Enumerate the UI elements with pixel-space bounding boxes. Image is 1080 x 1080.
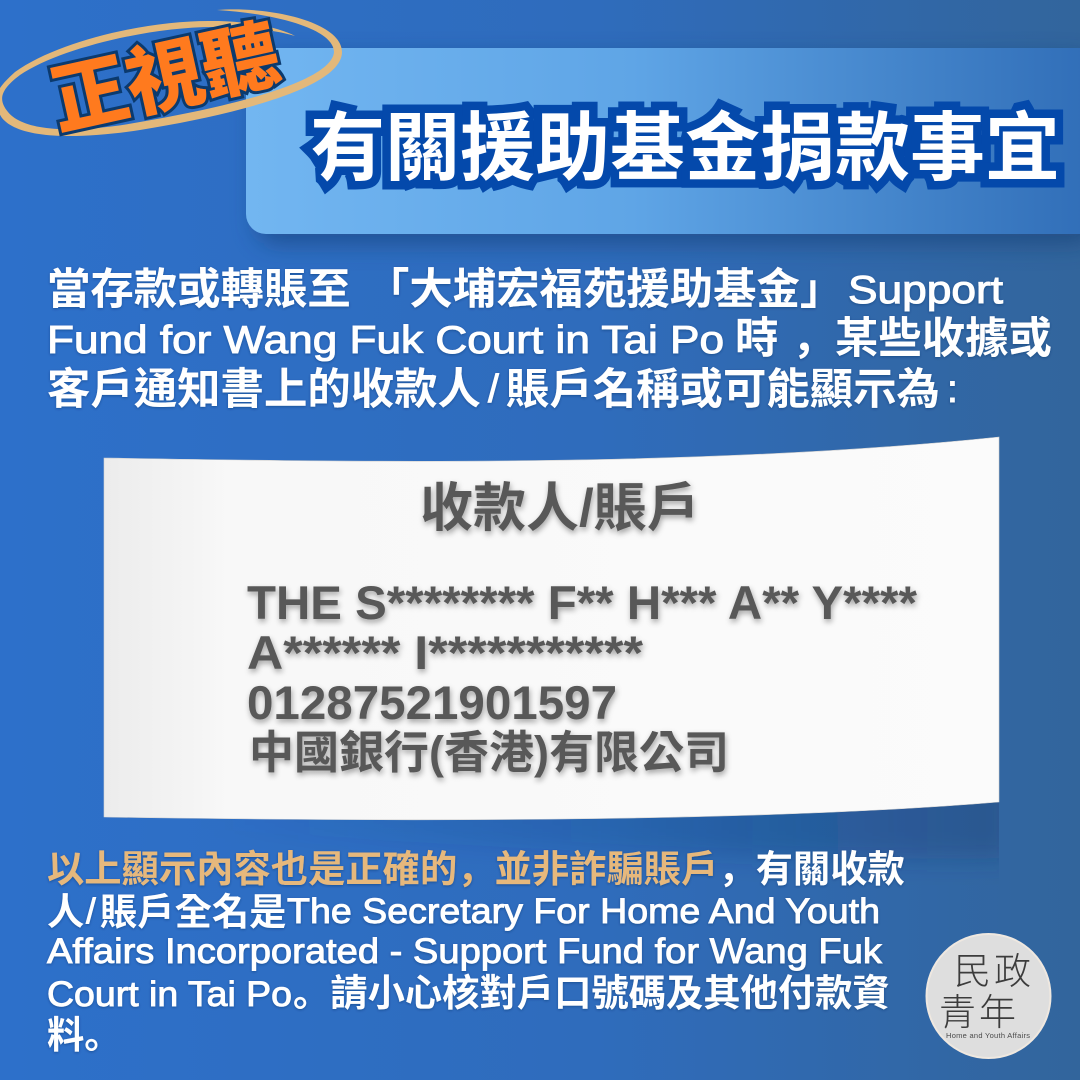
text block: intro: ， bbox=[792, 315, 835, 363]
card: account masked name: THE S******** F** H*** A** Y**** bbox=[247, 576, 918, 629]
text block: intro: 當存款或轉賬至 bbox=[47, 266, 351, 314]
text block: intro: 賬戶名稱或可能顯示為 bbox=[506, 366, 940, 414]
icon: logo badge: 民 bbox=[954, 951, 991, 992]
text block: intro: 時 bbox=[735, 315, 778, 363]
text block: intro: 客戶通知書上的收款人 bbox=[47, 366, 481, 414]
card: account number: 01287521901597 bbox=[247, 676, 617, 729]
text block: note: The Secretary For Home And Youth bbox=[287, 892, 880, 931]
tag: 正視聽: 正視聽 bbox=[43, 12, 287, 146]
text block: note: 以上顯示內容也是正確的，並非詐騙賬戶，有關收款 bbox=[47, 848, 905, 890]
text block: note: 人 bbox=[47, 891, 84, 933]
text block: intro: 某些收據或 bbox=[835, 315, 1052, 363]
text block: note bbox=[47, 848, 905, 1056]
icon: logo badge: Home and Youth Affairs bbox=[946, 1031, 1030, 1040]
panel: title banner bbox=[246, 48, 1080, 244]
text block: intro: : bbox=[947, 368, 958, 411]
icon: logo badge: 政 bbox=[994, 951, 1031, 992]
tag: hand-drawn ellipse bbox=[0, 9, 342, 136]
icon: logo badge: 年 bbox=[979, 992, 1016, 1033]
text block: intro: Fund for Wang Fuk Court in Tai Po bbox=[47, 319, 724, 362]
card: account masked name line 2: A****** I*********** bbox=[247, 626, 644, 679]
text block: note: 賬戶全名是 bbox=[100, 891, 286, 933]
text block: intro bbox=[47, 266, 1052, 414]
heading: title: 有關援助基金捐款事宜 bbox=[310, 106, 1060, 190]
text block: intro: / bbox=[488, 368, 499, 411]
text block: intro: Support bbox=[848, 269, 1003, 312]
panel: payee card bbox=[104, 437, 1010, 859]
icon: logo badge: 青 bbox=[939, 992, 976, 1033]
text block: note: 料。 bbox=[47, 1014, 122, 1056]
text block: note: Affairs Incorporated - Support Fund for Wang Fuk bbox=[47, 932, 883, 971]
text block: note: / bbox=[86, 892, 96, 931]
card: bank name: 中國銀行(香港)有限公司 bbox=[249, 727, 729, 778]
text block: note: 。請小心核對戶口號碼及其他付款資 bbox=[293, 972, 890, 1014]
icon: logo badge bbox=[926, 934, 1050, 1058]
text block: note: Court in Tai Po bbox=[47, 975, 292, 1014]
text block: intro: 「大埔宏福苑援助基金」 bbox=[366, 266, 843, 314]
card heading: 收款人/賬戶 bbox=[420, 479, 700, 538]
